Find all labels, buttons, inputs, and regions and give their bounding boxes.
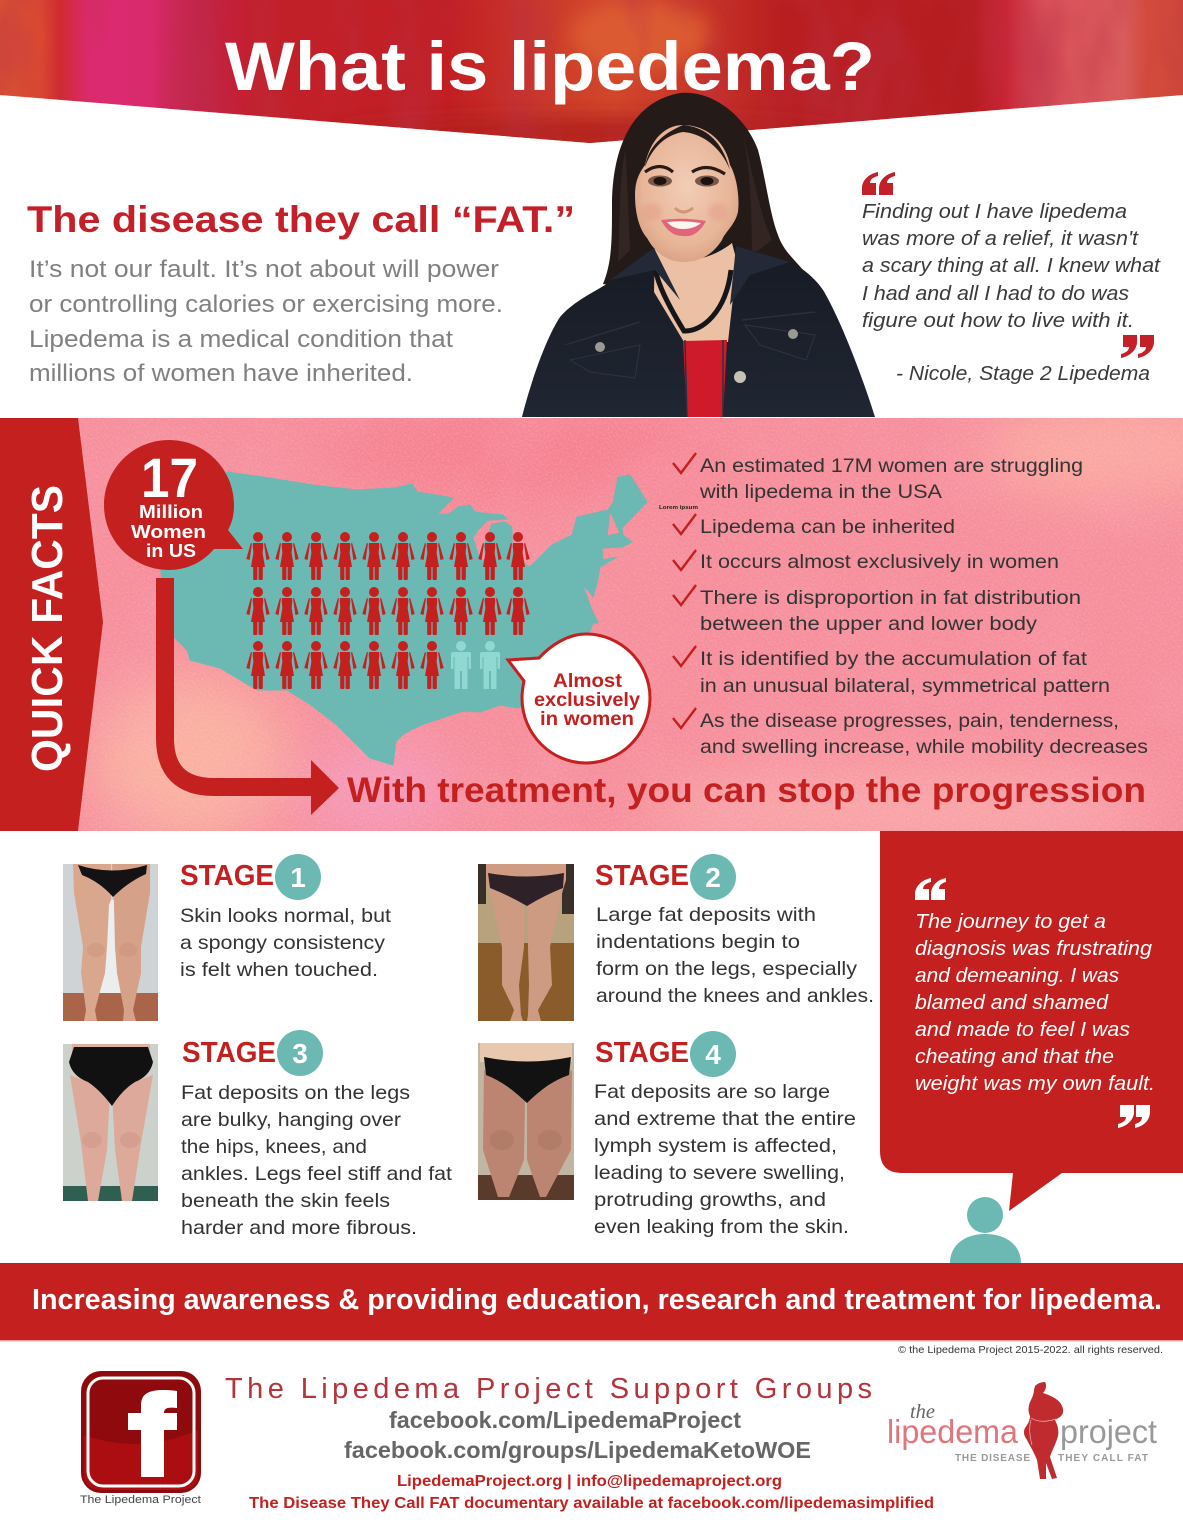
silhouette (1024, 1382, 1063, 1479)
description: ankles. Legs feel stiff and fat (181, 1163, 453, 1185)
quote: Nicole (862, 172, 1162, 385)
fact list: between the upper and lower body (700, 613, 1037, 635)
logo: the lipedema project: lipedema (887, 1413, 1019, 1450)
smile (661, 219, 706, 236)
description: Fat deposits on the legs (181, 1082, 410, 1104)
heading: STAGE (595, 1037, 689, 1069)
badge (690, 1031, 736, 1077)
support groups block (225, 1373, 934, 1512)
portrait of Nicole (522, 93, 875, 417)
description (181, 1082, 453, 1239)
quote text: and demeaning. I was (915, 965, 1119, 987)
treatment headline: With treatment, you can stop the progression (347, 771, 1146, 810)
badge (277, 1030, 323, 1076)
neck and chest (654, 243, 737, 342)
nose shading (675, 208, 693, 212)
logo: the lipedema project: THEY CALL FAT (1058, 1453, 1148, 1464)
photo: stage 4 legs (478, 1043, 574, 1200)
copyright: © the Lipedema Project 2015-2022. all rights reserved. (898, 1344, 1163, 1356)
support groups block: The Lipedema Project Support Groups (225, 1373, 872, 1405)
support groups block: The Disease They Call FAT documentary available at facebook.com/lipedemasimplified (249, 1495, 934, 1512)
bubble: 17 million women: 17 (141, 446, 198, 509)
description: are bulky, hanging over (181, 1109, 402, 1131)
description: is felt when touched. (180, 959, 378, 981)
opening quote mark (862, 172, 895, 195)
description (596, 904, 874, 1007)
fact list: with lipedema in the USA (699, 481, 942, 503)
stage 3 (63, 1030, 453, 1239)
quote text: a scary thing at all. I knew what (862, 255, 1162, 277)
callout: almost exclusively in women: Almost (553, 671, 623, 692)
description: leading to severe swelling, (594, 1162, 845, 1184)
brows (645, 166, 725, 174)
badge: 3 (292, 1038, 308, 1069)
hairline (645, 125, 730, 170)
fact list: in an unusual bilateral, symmetrical pattern (700, 675, 1110, 697)
description: even leaking from the skin. (594, 1216, 849, 1238)
intro paragraph: Lipedema is a medical condition that (29, 326, 453, 353)
bubble: 17 million women (104, 440, 243, 570)
callout: almost exclusively in women: in women (540, 709, 634, 730)
badge: 4 (705, 1039, 721, 1070)
description: and extreme that the entire (594, 1108, 856, 1130)
fact list: It is identified by the accumulation of fat (700, 648, 1088, 670)
quote text (915, 911, 1155, 1095)
stage 2 (478, 854, 874, 1021)
badge (690, 854, 736, 900)
quote text: Finding out I have lipedema (862, 201, 1127, 223)
badge: 1 (290, 862, 306, 893)
quote text (862, 201, 1162, 332)
closing quote mark (1118, 1105, 1150, 1128)
photo: stage 3 legs (63, 1044, 158, 1201)
quote text: cheating and that the (915, 1046, 1114, 1068)
description: around the knees and ankles. (596, 985, 874, 1007)
eyes (648, 176, 672, 186)
description (180, 905, 392, 981)
heading: STAGE (182, 1037, 276, 1069)
intro paragraph: millions of women have inherited. (29, 360, 413, 387)
panel: red quote speech bubble (880, 831, 1183, 1211)
quote text: I had and all I had to do was (862, 283, 1129, 305)
description: a spongy consistency (180, 932, 385, 954)
check marks (673, 453, 696, 728)
jacket collar (610, 246, 790, 312)
fact list: and swelling increase, while mobility decreases (700, 736, 1148, 758)
fact list: There is disproportion in fat distribution (700, 587, 1081, 609)
placeholder label: Lorem ipsum (659, 505, 698, 511)
icon: person (950, 1197, 1021, 1263)
description: harder and more fibrous. (181, 1217, 417, 1239)
fact list: It occurs almost exclusively in women (700, 551, 1059, 573)
header banner: watercolor red (0, 0, 1183, 153)
photo: stage 1 legs (63, 864, 158, 1021)
quick facts background (78, 418, 1183, 831)
description: indentations begin to (596, 931, 800, 953)
support groups block: facebook.com/LipedemaProject (389, 1407, 741, 1433)
bubble: 17 million women: Million (139, 501, 203, 522)
description: the hips, knees, and (181, 1136, 367, 1158)
heading: STAGE (180, 860, 274, 892)
jacket seams (565, 312, 815, 417)
intro paragraph (29, 256, 503, 387)
bubble: 17 million women: in US (146, 540, 196, 561)
hair (603, 93, 803, 300)
logo: the lipedema project: project (1060, 1413, 1157, 1450)
arrow (165, 578, 339, 815)
icon: facebook (81, 1371, 201, 1493)
callout: almost exclusively in women: exclusively (534, 690, 640, 711)
description: Fat deposits are so large (594, 1081, 830, 1103)
closing quote mark (1121, 335, 1154, 358)
description: protruding growths, and (594, 1189, 826, 1211)
description: lymph system is affected, (594, 1135, 837, 1157)
description (594, 1081, 856, 1238)
panel: quick facts (0, 400, 1183, 850)
quote text: figure out how to live with it. (862, 310, 1134, 332)
quote text: diagnosis was frustrating (915, 938, 1152, 960)
bubble: 17 million women: Women (131, 521, 206, 542)
fact list: Lipedema can be inherited (700, 516, 955, 538)
facebook caption: The Lipedema Project (80, 1494, 201, 1506)
description: beneath the skin feels (181, 1190, 390, 1212)
face (635, 125, 739, 262)
US map (160, 472, 647, 765)
heading: The disease they call FAT: The disease they call “FAT.” (27, 199, 575, 240)
badge: 2 (705, 862, 721, 893)
intro paragraph: It’s not our fault. It’s not about will power (29, 256, 499, 283)
description: form on the legs, especially (596, 958, 857, 980)
quote text: blamed and shamed (915, 992, 1109, 1014)
description: Large fat deposits with (596, 904, 816, 926)
red side strip (0, 418, 103, 831)
quote text: was more of a relief, it wasn't (862, 228, 1140, 250)
jacket buttons (595, 342, 605, 352)
photo: stage 2 legs (478, 864, 574, 1021)
support groups block: facebook.com/groups/LipedemaKetoWOE (344, 1437, 811, 1463)
vertical heading: QUICK FACTS (23, 485, 72, 772)
red top (683, 340, 727, 417)
stage 1 (63, 854, 392, 1021)
fact list (699, 455, 1148, 758)
opening quote mark (915, 878, 946, 900)
intro paragraph: or controlling calories or exercising more. (29, 291, 503, 318)
logo: the lipedema project (887, 1382, 1157, 1479)
jacket (522, 245, 875, 417)
title: What is lipedema? (225, 28, 875, 105)
badge (275, 854, 321, 900)
attribution: - Nicole, Stage 2 Lipedema (896, 363, 1150, 385)
awareness banner: Increasing awareness & providing education, research and treatment for lipedema. (32, 1284, 1162, 1316)
logo: the lipedema project: THE DISEASE (955, 1453, 1030, 1464)
description: Skin looks normal, but (180, 905, 392, 927)
awareness banner (0, 1263, 1183, 1342)
stage 4 (478, 1031, 856, 1238)
fact list: An estimated 17M women are struggling (700, 455, 1083, 477)
necklace (654, 262, 731, 331)
heading: STAGE (595, 860, 689, 892)
quote text: weight was my own fault. (915, 1073, 1155, 1095)
quote text: The journey to get a (915, 911, 1106, 933)
logo: the lipedema project: the (910, 1401, 935, 1423)
pictogram: 27 women, 2 men (246, 532, 530, 689)
fact list: As the disease progresses, pain, tenderness, (700, 710, 1119, 732)
cheeks (642, 203, 662, 221)
callout: almost exclusively in women (508, 634, 650, 763)
support groups block: LipedemaProject.org | info@lipedemaproject.org (397, 1473, 782, 1490)
quote text: and made to feel I was (915, 1019, 1130, 1041)
